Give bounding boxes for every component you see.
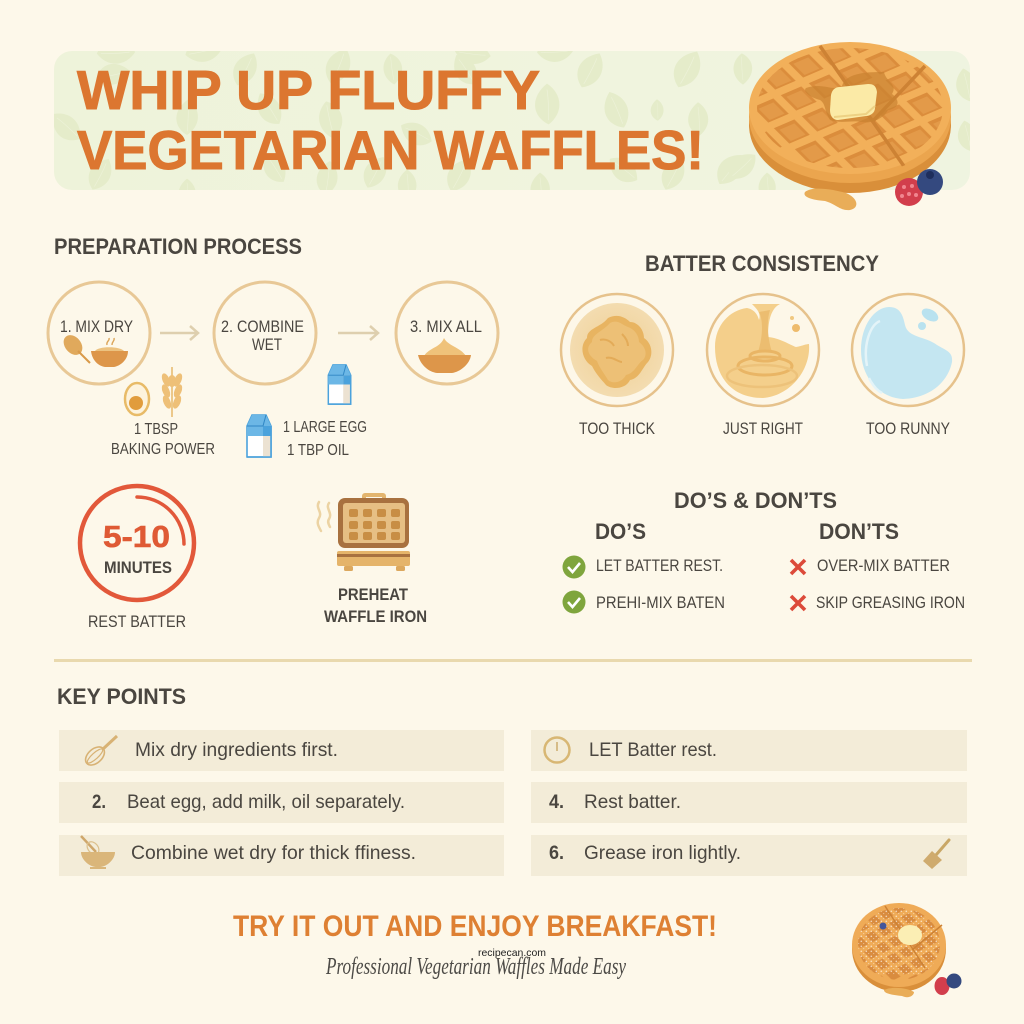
icon: waffle iron [318, 493, 410, 571]
column: do's [562, 519, 725, 614]
column: don'ts [791, 519, 965, 612]
column: do's: DO’S [595, 519, 646, 544]
title: WHIP UP FLUFFY [77, 59, 540, 121]
step 1: mix dry [48, 282, 150, 384]
label: preheat waffle iron: WAFFLE IRON [324, 607, 427, 626]
icon: check [562, 590, 586, 614]
key point 4: LET Batter rest. [589, 739, 717, 761]
arrow 1 [160, 326, 198, 340]
butter [830, 84, 877, 120]
steam [318, 502, 330, 531]
icon: whisk [82, 736, 117, 769]
icon: brush [923, 840, 949, 869]
column: don'ts: OVER-MIX BATTER [817, 557, 950, 575]
timer: rest batter [80, 486, 194, 631]
icon: waffle with butter and berries [749, 40, 951, 210]
key point 6: Grease iron lightly. [584, 842, 741, 864]
banner [54, 51, 970, 190]
text: wet ingredients: 1 TBP OIL [287, 442, 349, 459]
text: baking power [111, 421, 215, 458]
timer: rest batter: MINUTES [104, 558, 172, 577]
label: TOO RUNNY [866, 420, 950, 438]
key point 5: 4. [549, 791, 564, 813]
icon: milk carton lower [247, 415, 271, 457]
icon: small waffle [852, 903, 962, 997]
batter: too runny [852, 294, 964, 438]
icon: wheat [160, 367, 184, 417]
blueberry [917, 169, 943, 195]
text: baking power: BAKING POWER [111, 441, 215, 458]
label: TOO THICK [579, 420, 655, 438]
column: don'ts: SKIP GREASING IRON [816, 594, 965, 612]
key point 5: Rest batter. [584, 791, 681, 813]
icon: cross [791, 560, 805, 574]
step 2: combine wet [214, 282, 316, 384]
key point 6 [531, 835, 967, 876]
text: wet ingredients: 1 LARGE EGG [283, 419, 367, 436]
step 3: mix all [396, 282, 498, 384]
raspberry [895, 178, 923, 206]
icon: bowl and whisk [81, 836, 115, 869]
key point 6: 6. [549, 842, 564, 864]
step 1: mix dry: 1. MIX DRY [60, 318, 133, 336]
key point 2 [59, 782, 504, 823]
timer: rest batter: 5-10 [103, 519, 170, 554]
title: VEGETARIAN WAFFLES! [77, 119, 704, 181]
heading: do's and don'ts: DO’S & DON’TS [674, 488, 837, 513]
column: do's: LET BATTER REST. [596, 557, 723, 575]
heading: preparation process: PREPARATION PROCESS [54, 234, 302, 259]
batter: too thick [561, 294, 673, 438]
icon: clock [544, 738, 570, 762]
key point 4 [531, 730, 967, 771]
text: baking power: 1 TBSP [134, 421, 178, 438]
key point 2: Beat egg, add milk, oil separately. [127, 791, 405, 813]
syrup [805, 72, 898, 122]
arrow 2 [338, 326, 378, 340]
icon: spoon [60, 331, 90, 363]
key point 3: Combine wet dry for thick fﬁness. [131, 842, 416, 864]
label: preheat waffle iron [324, 585, 427, 626]
column: don'ts: DON’TS [819, 519, 899, 544]
icon: check [562, 556, 586, 578]
icon: bowl [91, 338, 128, 367]
key point 2: 2. [92, 791, 106, 813]
key point 5 [531, 782, 967, 823]
icon: bowl of batter [418, 338, 471, 373]
watermark: recipecan.com [478, 947, 546, 959]
label: REST BATTER [88, 613, 186, 631]
icon: egg [125, 383, 149, 415]
heading: batter consistency: BATTER CONSISTENCY [645, 251, 879, 276]
key point 1 [59, 730, 504, 771]
label: JUST RIGHT [723, 420, 803, 438]
call to action: TRY IT OUT AND ENJOY BREAKFAST! [233, 910, 717, 943]
heading: key points: KEY POINTS [57, 684, 186, 709]
syrup drip [804, 189, 856, 210]
step 3: mix all: 3. MIX ALL [410, 318, 482, 336]
batter: just right [707, 294, 819, 438]
icon: milk carton upper [328, 365, 351, 404]
label: preheat waffle iron: PREHEAT [338, 585, 409, 604]
column: do's: PREHI-MIX BATEN [596, 594, 725, 612]
step 2: combine wet: 2. COMBINE [221, 318, 304, 336]
icon: cross [791, 596, 805, 610]
text: wet ingredients [283, 419, 367, 459]
key point 1: Mix dry ingredients first. [135, 739, 338, 761]
step 2: combine wet: WET [252, 336, 282, 354]
title [77, 59, 704, 181]
tagline: Professional Vegetarian Waffles Made Easy [325, 954, 626, 980]
key point 3 [59, 835, 504, 876]
